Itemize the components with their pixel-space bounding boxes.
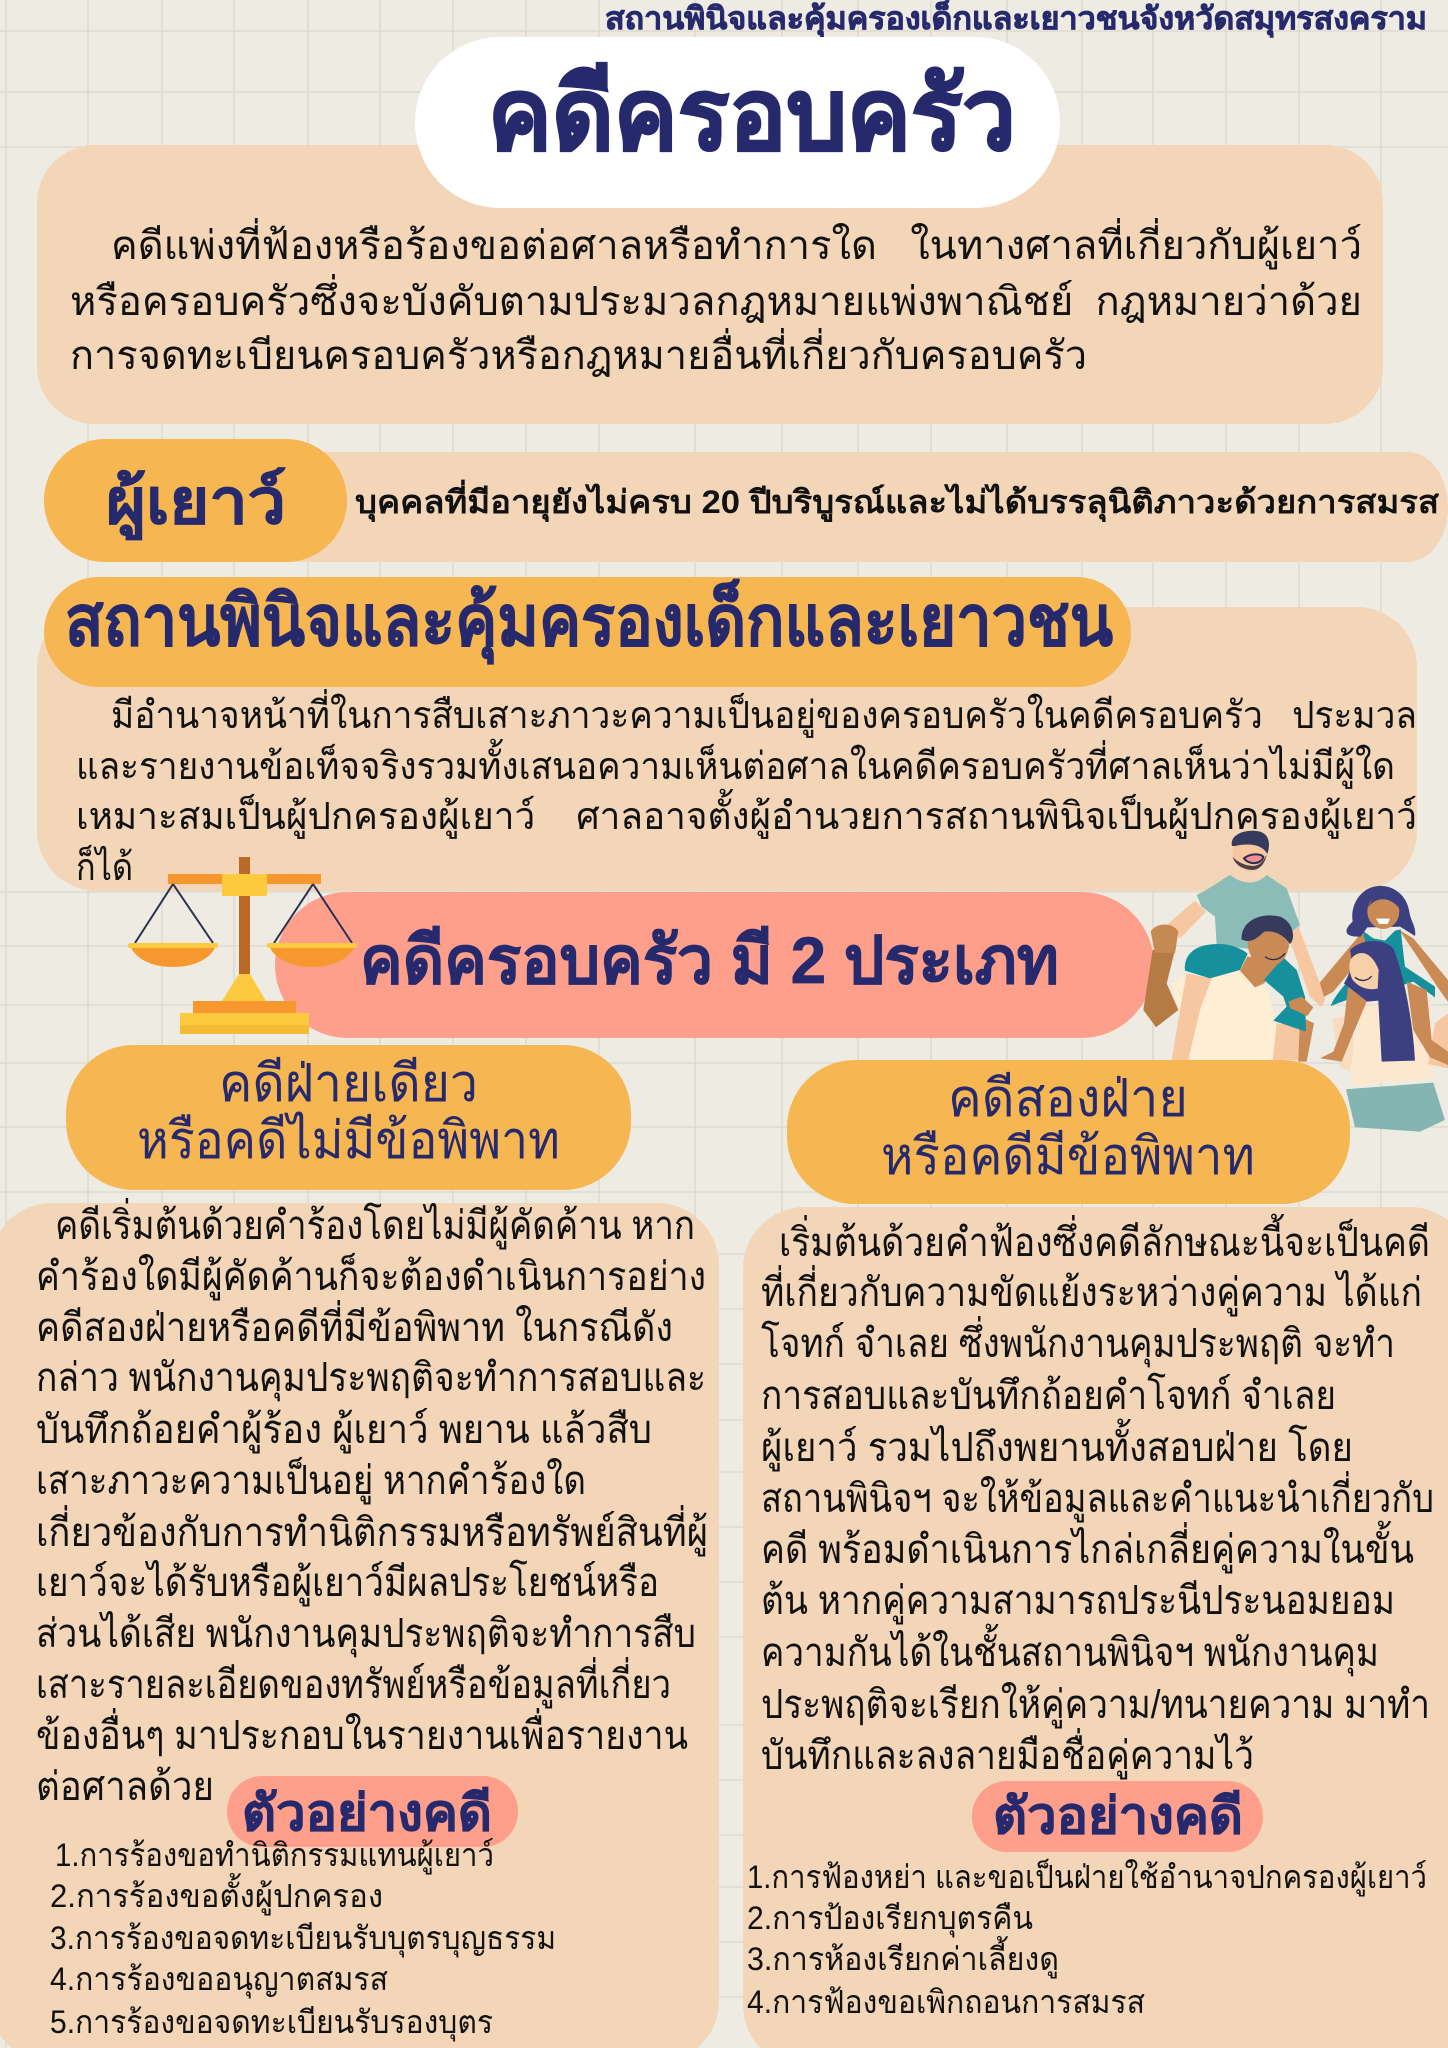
examples list: [747, 1858, 1427, 2020]
panel: two-party case details: [743, 1207, 1448, 2048]
banner heading: คดีครอบครัว มี 2 ประเภท: [360, 923, 1059, 997]
card heading: [137, 1055, 560, 1170]
panel: definition: [37, 145, 1383, 424]
one-party description: เกี่ยวข้องกับการทำนิติกรรมหรือทรัพย์สินที่ผู้: [36, 1505, 708, 1556]
illustration: family: [1143, 831, 1448, 1132]
one-party description: คดีสองฝ่ายหรือคดีที่มีข้อพิพาท ในกรณีดัง: [36, 1300, 673, 1350]
one-party description: เยาว์จะได้รับหรือผู้เยาว์มีผลประโยชน์หรือ: [36, 1560, 659, 1606]
examples heading pill: [227, 1776, 518, 1847]
two-party description: การสอบและบันทึกถ้อยคำโจทก์ จำเลย: [761, 1373, 1336, 1418]
one-party description: ข้องอื่นๆ มาประกอบในรายงานเพื่อรายงาน: [36, 1708, 688, 1758]
card heading: หรือคดีมีข้อพิพาท: [881, 1128, 1255, 1186]
panel: minor definition: [44, 439, 1448, 562]
examples list: 3.การร้องขอจดทะเบียนรับบุตรบุญธรรม: [50, 1920, 556, 1958]
minor definition text: บุคคลที่มีอายุยังไม่ครบ 20 ปีบริบูรณ์และไม่ได้บรรลุนิติภาวะด้วยการสมรส: [355, 479, 1440, 523]
icon: scales of justice: [128, 857, 357, 1034]
man: [1143, 831, 1325, 1062]
centre heading: สถานพินิจและคุ้มครองเด็กและเยาวชน: [65, 578, 1113, 665]
definition text: หรือครอบครัวซึ่งจะบังคับตามประมวลกฎหมายแพ่งพาณิชย์ กฎหมายว่าด้วย: [70, 274, 1362, 324]
centre text: [76, 689, 1417, 889]
one-party description: [36, 1198, 708, 1809]
examples list: 2.การร้องขอตั้งผู้ปกครอง: [50, 1873, 383, 1916]
examples heading pill: [972, 1781, 1263, 1852]
one-party description: คดีเริ่มต้นด้วยคำร้องโดยไม่มีผู้คัดค้าน หาก: [55, 1198, 695, 1249]
definition text: คดีแพ่งที่ฟ้องหรือร้องขอต่อศาลหรือทำการใด ในทางศาลที่เกี่ยวกับผู้เยาว์: [111, 218, 1362, 269]
title: คดีครอบครัว: [488, 59, 1016, 171]
card: one-party case: [66, 1045, 631, 1190]
examples list: 4.การร้องขออนุญาตสมรส: [50, 1961, 388, 1999]
one-party description: คำร้องใดมีผู้คัดค้านก็จะต้องดำเนินการอย่าง: [36, 1252, 706, 1300]
definition text: การจดทะเบียนครอบครัวหรือกฎหมายอื่นที่เกี่ยวกับครอบครัว: [70, 328, 1087, 378]
examples list: [50, 1837, 556, 2042]
two-party description: [761, 1213, 1434, 1779]
examples list: 2.การป้องเรียกบุตรคืน: [747, 1900, 1033, 1938]
woman: [1320, 941, 1448, 1132]
examples list: 5.การร้องขอจดทะเบียนรับรองบุตร: [50, 2004, 493, 2042]
card heading: [881, 1070, 1255, 1186]
panel: juvenile observation centre: [37, 577, 1417, 891]
minor heading: ผู้เยาว์: [106, 467, 286, 540]
title pill: [415, 37, 1060, 208]
examples heading pill: ตัวอย่างคดี: [993, 1788, 1243, 1844]
header: organisation name: สถานพินิจและคุ้มครองเด็กและเยาวชนจังหวัดสมุทรสงคราม: [605, 0, 1427, 38]
examples list: 4.การฟ้องขอเพิกถอนการสมรส: [747, 1984, 1145, 2020]
examples heading pill: ตัวอย่างคดี: [242, 1785, 492, 1841]
one-party description: บันทึกถ้อยคำผู้ร้อง ผู้เยาว์ พยาน แล้วสืบ: [36, 1407, 652, 1453]
girl on woman's shoulders: [1319, 886, 1448, 1006]
definition text: [70, 218, 1362, 378]
one-party description: กล่าว พนักงานคุมประพฤติจะทำการสอบและ: [36, 1356, 706, 1402]
two-party description: บันทึกและลงลายมือชื่อคู่ความไว้: [761, 1728, 1254, 1779]
one-party description: เสาะรายละเอียดของทรัพย์หรือข้อมูลที่เกี่ยว: [36, 1657, 671, 1708]
panel: one-party case details: [0, 1198, 719, 2048]
centre text: ก็ได้: [76, 844, 133, 889]
banner: two types: [275, 892, 1154, 1038]
one-party description: ส่วนได้เสีย พนักงานคุมประพฤติจะทำการสืบ: [36, 1611, 696, 1658]
card heading: หรือคดีไม่มีข้อพิพาท: [137, 1111, 560, 1170]
one-party description: ต่อศาลด้วย: [36, 1765, 214, 1809]
card heading: คดีสองฝ่าย: [948, 1070, 1188, 1128]
two-party description: ผู้เยาว์ รวมไปถึงพยานทั้งสอบฝ่าย โดย: [761, 1418, 1353, 1471]
card heading: คดีฝ่ายเดียว: [219, 1055, 478, 1113]
two-party description: ความกันได้ในชั้นสถานพินิจฯ พนักงานคุม: [761, 1623, 1379, 1677]
examples list: 1.การร้องขอทำนิติกรรมแทนผู้เยาว์: [55, 1837, 494, 1875]
card: two-party case: [787, 1060, 1350, 1204]
one-party description: เสาะภาวะความเป็นอยู่ หากคำร้องใด: [36, 1456, 586, 1504]
centre text: เหมาะสมเป็นผู้ปกครองผู้เยาว์ ศาลอาจตั้งผู้อำนวยการสถานพินิจเป็นผู้ปกครองผู้เยาว์: [76, 788, 1417, 839]
examples list: 3.การห้องเรียกค่าเลี้ยงดู: [747, 1936, 1059, 1979]
